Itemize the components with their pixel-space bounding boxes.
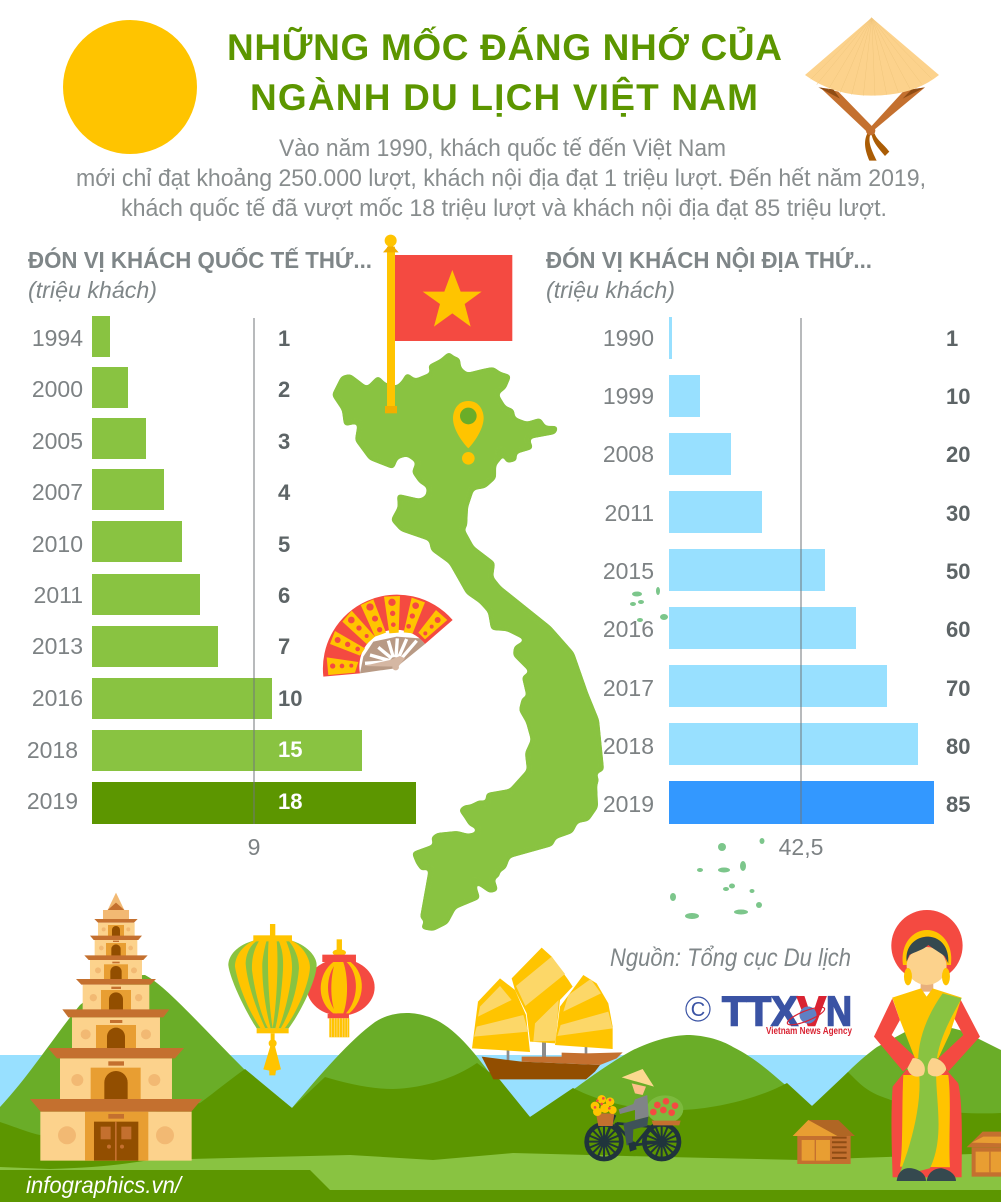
bar chart: domestic visitors: 2017	[603, 675, 654, 701]
bar chart: domestic visitors: 1	[946, 326, 958, 351]
bar chart: international visitors: 2016	[32, 685, 83, 711]
icon: flag on pole	[383, 235, 512, 413]
bar chart: domestic visitors: 60	[946, 617, 970, 642]
islands: Paracel	[630, 587, 668, 622]
bar chart: international visitors: 2005	[32, 428, 83, 454]
bar chart: international visitors: 2000	[32, 376, 83, 402]
bar chart: domestic visitors: 85	[946, 792, 970, 817]
bar chart: domestic visitors: 1999	[603, 383, 654, 409]
bar chart: international visitors: 3	[278, 429, 290, 454]
bar chart: international visitors: 2019	[27, 788, 78, 814]
landscape background	[0, 975, 1001, 1202]
bar chart: international visitors: 2011	[34, 582, 83, 608]
pagoda	[30, 893, 202, 1161]
bar chart: domestic visitors: 2008	[603, 441, 654, 467]
bar chart: domestic visitors: 2019	[603, 791, 654, 817]
bar chart: international visitors: 1994	[32, 325, 83, 351]
icon: red lantern	[307, 939, 375, 1037]
bar chart: international visitors: 15	[278, 737, 302, 762]
bar chart: international visitors: 18	[278, 789, 302, 814]
bar chart: international visitors	[27, 316, 416, 860]
intro text: mới chỉ đạt khoảng 250.000 lượt, khách nội địa đạt 1 triệu lượt. Đến hết năm 2019,	[76, 165, 926, 192]
bar chart: international visitors: 7	[278, 634, 290, 659]
icon: hand fan	[323, 595, 453, 677]
bar chart: domestic visitors: 1990	[603, 325, 654, 351]
logo: TTXVN	[686, 988, 852, 1037]
logo: TTXVN: Vietnam News Agency	[766, 1026, 852, 1037]
bar chart: domestic visitors: 2015	[603, 558, 654, 584]
heading: domestic visitors: (triệu khách)	[546, 277, 675, 303]
logo: TTXVN: TTX	[722, 988, 798, 1034]
heading: international visitors: (triệu khách)	[28, 277, 157, 303]
icon: location pin	[453, 401, 484, 465]
woman in ao dai	[874, 910, 980, 1181]
bar chart: international visitors: 10	[278, 686, 302, 711]
cyclist with flowers	[587, 1069, 683, 1159]
icon: green and yellow lantern	[228, 924, 317, 1075]
bar chart: domestic visitors	[603, 317, 970, 860]
bar chart: international visitors: 2010	[32, 531, 83, 557]
bar chart: international visitors: 6	[278, 583, 290, 608]
bar chart: domestic visitors: 2018	[603, 733, 654, 759]
intro text	[76, 135, 926, 222]
bar chart: domestic visitors: 20	[946, 442, 970, 467]
house left	[793, 1120, 855, 1164]
map of Vietnam	[333, 353, 603, 930]
intro text: Vào năm 1990, khách quốc tế đến Việt Nam	[279, 135, 726, 162]
logo: TTXVN: C	[691, 999, 705, 1021]
logo: TTXVN: N	[826, 988, 852, 1034]
intro text: khách quốc tế đã vượt mốc 18 triệu lượt và khách nội địa đạt 85 triệu lượt.	[121, 195, 887, 222]
bar chart: international visitors: 2013	[32, 633, 83, 659]
title	[227, 26, 782, 118]
bar chart: international visitors: 2018	[27, 737, 78, 763]
bar chart: international visitors: 5	[278, 532, 290, 557]
bar chart: international visitors: 9	[248, 834, 260, 860]
bar chart: international visitors: 2	[278, 377, 290, 402]
bar chart: international visitors: 2007	[32, 479, 83, 505]
bar chart: international visitors: 1	[278, 326, 290, 351]
bar chart: domestic visitors: 80	[946, 734, 970, 759]
bar chart: domestic visitors: 30	[946, 501, 970, 526]
bar chart: domestic visitors: 50	[946, 559, 970, 584]
bar chart: domestic visitors: 70	[946, 676, 970, 701]
bar chart: domestic visitors: 10	[946, 384, 970, 409]
bar chart: domestic visitors: 2011	[605, 500, 654, 526]
heading: international visitors: ĐÓN VỊ KHÁCH QUỐC TẾ THỨ...	[28, 246, 372, 273]
heading: domestic visitors: ĐÓN VỊ KHÁCH NỘI ĐỊA THỨ...	[546, 246, 872, 273]
heading: international visitors	[28, 246, 372, 303]
bar chart: domestic visitors: 2016	[603, 616, 654, 642]
logo: TTXVN: V	[797, 988, 826, 1034]
title: NGÀNH DU LỊCH VIỆT NAM	[250, 76, 758, 118]
source text: Nguồn: Tổng cục Du lịch	[610, 944, 851, 972]
bar chart: international visitors: 4	[278, 480, 291, 505]
heading: domestic visitors	[546, 246, 872, 303]
bar chart: domestic visitors: 42,5	[779, 834, 823, 860]
islands: Spratly	[670, 838, 764, 919]
icon: junk boat	[472, 948, 623, 1079]
icon: sun	[63, 20, 197, 154]
website credit: infographics.vn/	[26, 1172, 184, 1198]
icon: conical hat	[805, 18, 939, 161]
house right	[967, 1132, 1001, 1177]
title: NHỮNG MỐC ĐÁNG NHỚ CỦA	[227, 26, 782, 68]
